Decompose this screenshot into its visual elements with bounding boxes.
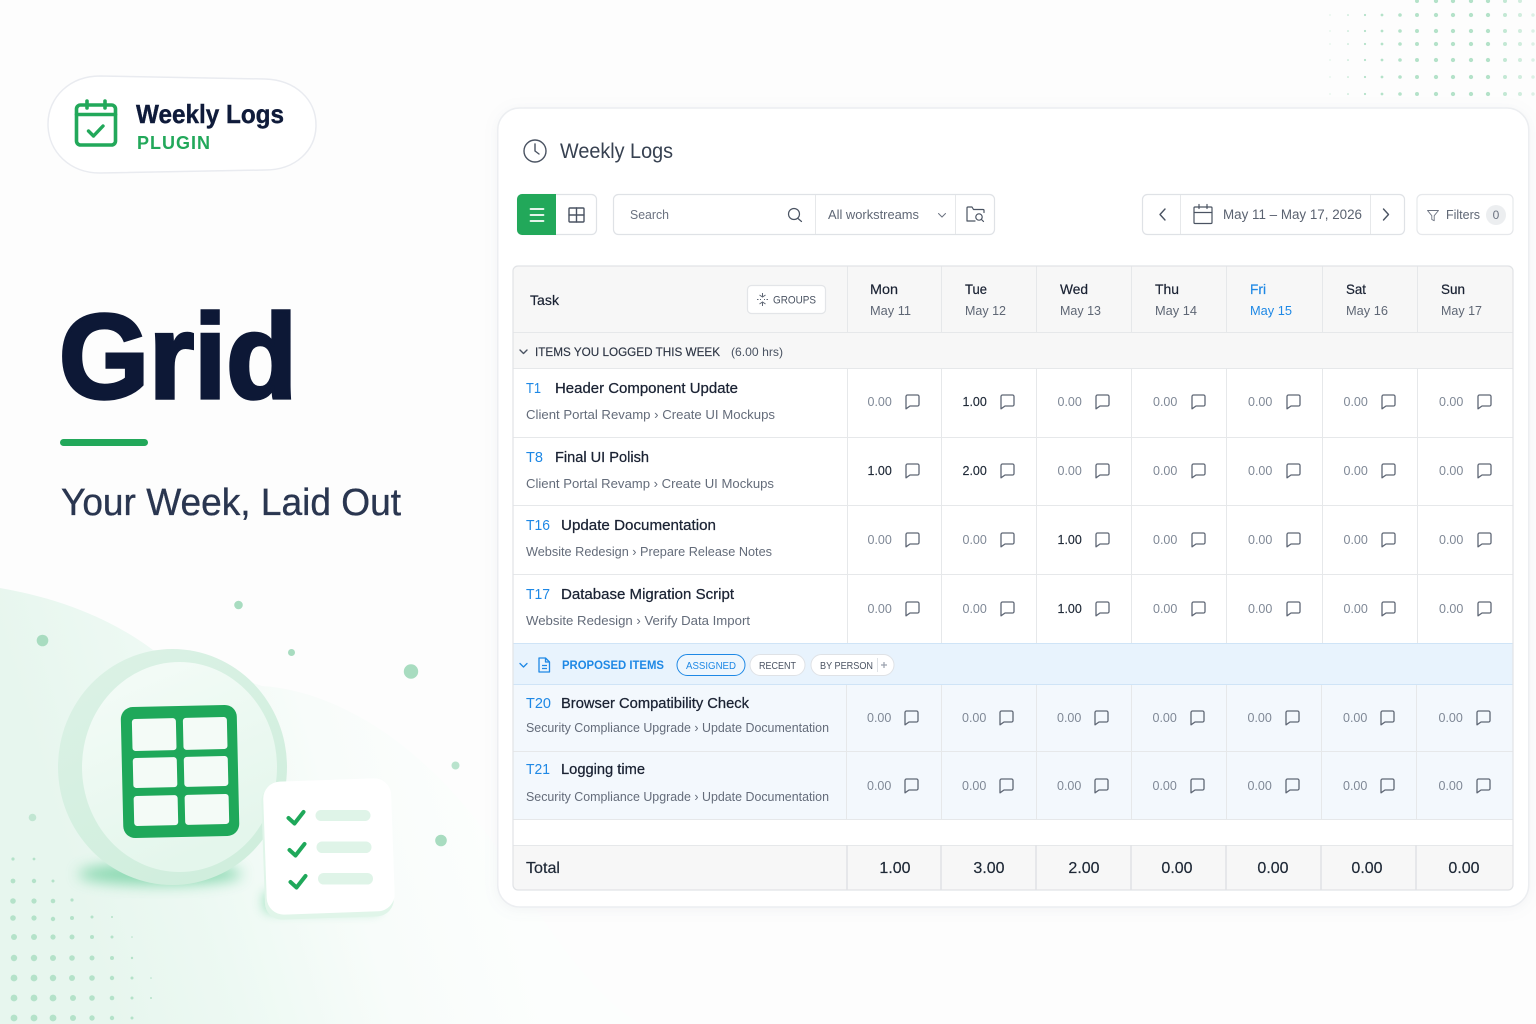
row: T20: 0.00: [1057, 711, 1081, 725]
date range selector: [1142, 194, 1404, 234]
row: total: 1.00: [879, 860, 911, 877]
proposed rows background: [513, 684, 1513, 819]
row: T20: 0.00: [1152, 711, 1177, 725]
row: total: 3.00: [973, 860, 1005, 877]
row: T16: [526, 517, 1491, 559]
table header: Wed: [1060, 281, 1088, 297]
row: T16: 0.00: [1344, 533, 1368, 547]
search and workstream filter: All workstreams: [828, 208, 919, 222]
filters button: [1417, 194, 1513, 234]
row: T21: 0.00: [1438, 779, 1463, 793]
row: T8: 1.00: [868, 464, 892, 478]
row: T20: 0.00: [1343, 711, 1367, 725]
row: T21: Logging time: [561, 762, 645, 778]
row: T20: 0.00: [962, 711, 986, 725]
row: T20: 0.00: [867, 711, 891, 725]
filters button: Filters: [1446, 208, 1480, 222]
table header: May 14: [1155, 303, 1197, 318]
row: T17: 0.00: [1439, 602, 1463, 616]
row: T1: 0.00: [1344, 395, 1368, 409]
row: T16: 1.00: [1058, 533, 1082, 547]
row: T8: T8: [526, 449, 543, 466]
row: T20: Browser Compatibility Check: [561, 696, 750, 712]
row: T20: [526, 695, 1490, 735]
halftone dots: top right: [1330, 1, 1533, 94]
row: T16: T16: [526, 517, 550, 534]
row: total: 0.00: [1351, 860, 1383, 877]
illustration: grid medallion: [58, 649, 287, 885]
row: T8: Client Portal Revamp › Create UI Mockups: [526, 476, 774, 491]
table header: Sun: [1441, 281, 1465, 297]
table header: [513, 266, 1513, 332]
filter pill: assigned: ASSIGNED: [686, 660, 736, 672]
panel: weekly logs app: [498, 108, 1529, 907]
table header: May 16: [1346, 303, 1388, 318]
badge subtitle: PLUGIN: [137, 133, 210, 153]
badge title: Weekly Logs: [136, 99, 284, 129]
row: T8: 0.00: [1058, 464, 1082, 478]
row: T8: 0.00: [1439, 464, 1463, 478]
icon: calendar check: [76, 101, 116, 145]
floating decorative dots: [29, 601, 459, 846]
row: total: 0.00: [1448, 860, 1480, 877]
row: T17: 0.00: [868, 602, 892, 616]
table header: Fri: [1250, 281, 1266, 297]
row: T1: 0.00: [1248, 395, 1272, 409]
table header: May 12: [965, 303, 1006, 318]
row: T1: Header Component Update: [555, 381, 738, 397]
row: T1: 0.00: [1153, 395, 1177, 409]
row: T21: 0.00: [867, 779, 891, 793]
row: T21: T21: [526, 761, 550, 778]
plugin badge: [48, 76, 316, 173]
halftone dots: bottom left: [10, 857, 152, 1021]
row: T21: 0.00: [962, 779, 986, 793]
row: T1: 0.00: [1439, 395, 1463, 409]
table header: Sat: [1346, 281, 1366, 297]
row: T17: Website Redesign › Verify Data Import: [526, 613, 750, 628]
section: items logged this week: (6.00 hrs): [731, 345, 783, 359]
row: total: 0.00: [1257, 860, 1289, 877]
icon: green table grid: [121, 705, 240, 838]
section: items logged this week: [513, 332, 1513, 368]
filter pill: assigned: [677, 654, 745, 676]
row: T16: Update Documentation: [561, 518, 716, 534]
row: T20: Security Compliance Upgrade › Update Documentation: [526, 720, 829, 735]
row: T8: Final UI Polish: [555, 450, 649, 466]
icon: clock: [524, 140, 546, 162]
table header: Task: [530, 292, 560, 308]
view toggle: [517, 194, 596, 235]
checklist rows: [288, 812, 306, 888]
row: T17: Database Migration Script: [561, 587, 734, 603]
section: proposed items: PROPOSED ITEMS: [562, 658, 664, 672]
section: proposed items: [513, 643, 1513, 684]
row: total: 2.00: [1068, 860, 1100, 877]
row: T8: 2.00: [962, 464, 987, 478]
filter pill: by person: BY PERSON: [820, 660, 873, 672]
filter pill: recent: RECENT: [759, 660, 796, 672]
row: total: Total: [526, 860, 560, 877]
row: T21: 0.00: [1248, 779, 1272, 793]
row: T21: 0.00: [1343, 779, 1367, 793]
row: T1: [526, 380, 1491, 422]
row: T1: T1: [526, 380, 541, 397]
row: T17: 0.00: [1153, 602, 1177, 616]
row: T17: 0.00: [1344, 602, 1368, 616]
table header: Tue: [965, 281, 987, 297]
row: T16: Website Redesign › Prepare Release Notes: [526, 544, 772, 559]
table header: May 11: [870, 303, 911, 318]
accent bar: [60, 439, 148, 446]
table header: May 15: [1250, 303, 1292, 318]
filters button: 0: [1493, 208, 1500, 222]
filter pill: by person: [811, 654, 894, 676]
row: T21: 0.00: [1152, 779, 1177, 793]
row: total: [526, 860, 1480, 877]
row: T8: 0.00: [1248, 464, 1272, 478]
row: T17: [526, 586, 1491, 628]
row: T1: 1.00: [962, 395, 987, 409]
date range selector: May 11 – May 17, 2026: [1223, 207, 1362, 222]
row: T1: 0.00: [868, 395, 892, 409]
total row background: [513, 845, 1513, 890]
row: T20: 0.00: [1248, 711, 1272, 725]
row: T8: [526, 449, 1491, 491]
groups button: [748, 286, 826, 314]
row: T21: 0.00: [1057, 779, 1081, 793]
row: T21: Security Compliance Upgrade › Update Documentation: [526, 789, 829, 804]
row: T17: 0.00: [962, 602, 987, 616]
panel heading: Weekly Logs: [560, 140, 673, 163]
row: T16: 0.00: [1248, 533, 1272, 547]
row: total: 0.00: [1161, 860, 1193, 877]
table header: May 13: [1060, 303, 1101, 318]
row: T20: T20: [526, 695, 551, 712]
row: T16: 0.00: [868, 533, 892, 547]
row: T17: T17: [526, 586, 550, 603]
search and workstream filter: [614, 194, 994, 234]
table header: Mon: [870, 281, 898, 297]
row: T8: 0.00: [1344, 464, 1368, 478]
row: T16: 0.00: [962, 533, 987, 547]
search and workstream filter: Search: [630, 208, 669, 222]
row: T17: 1.00: [1058, 602, 1082, 616]
filter pill: recent: [750, 654, 805, 676]
subtitle: Your Week, Laid Out: [61, 482, 401, 524]
title: Grid: [59, 290, 297, 424]
row: T17: 0.00: [1248, 602, 1272, 616]
groups button: GROUPS: [773, 294, 816, 306]
table header: Thu: [1155, 281, 1179, 297]
section: items logged this week: ITEMS YOU LOGGED THIS WEEK: [535, 345, 720, 359]
row: T1: 0.00: [1058, 395, 1082, 409]
row: T21: [526, 761, 1490, 804]
row: T16: 0.00: [1153, 533, 1177, 547]
table: [513, 266, 1513, 890]
row: T20: 0.00: [1438, 711, 1463, 725]
row: T8: 0.00: [1153, 464, 1177, 478]
illustration: checklist card: [261, 778, 395, 920]
row: T16: 0.00: [1439, 533, 1463, 547]
table header: May 17: [1441, 303, 1482, 318]
row: T1: Client Portal Revamp › Create UI Mockups: [526, 407, 775, 422]
